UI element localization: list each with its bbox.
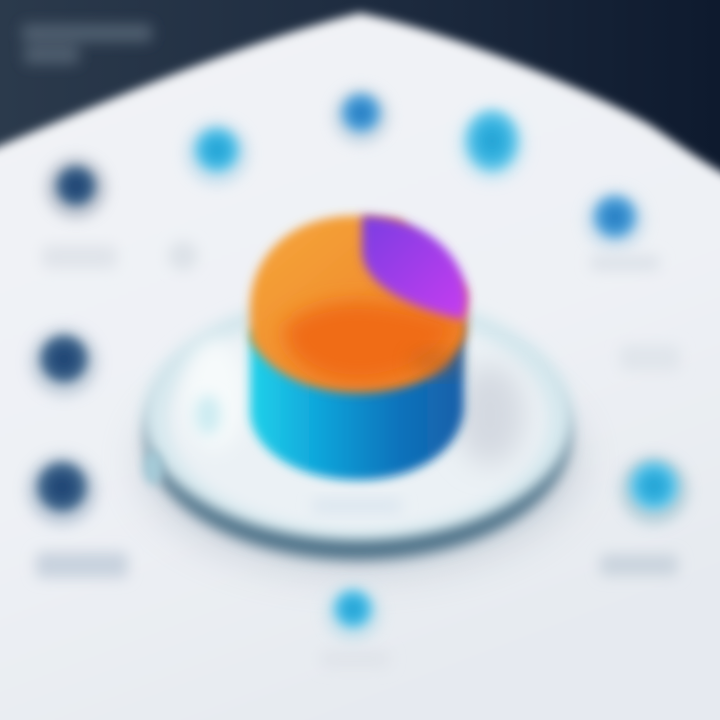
blurred labels [36,245,680,668]
label: lower right [600,554,678,576]
node: lower left [27,455,97,525]
blurred header title [22,24,152,64]
node: top center [333,88,389,144]
platform inner disc [168,310,548,530]
platform top [142,292,574,540]
label: bottom [320,650,390,668]
node: right blue [585,190,645,250]
platform left tab [143,451,163,485]
orange slice main [250,216,466,392]
label: lower left [36,552,128,578]
node: small faint [168,241,198,271]
platform base [146,312,570,560]
icon nodes [27,88,688,641]
platform left highlight [185,340,245,450]
platform right shadow [456,365,524,465]
node: upper left blue [185,121,249,185]
platform cast shadow [140,350,580,574]
node: middle left [30,328,98,396]
node: upper right cyan [458,107,526,181]
platform marker [195,395,221,435]
label: top left [42,245,117,269]
node: bottom center [325,585,381,641]
label: right [590,255,660,271]
orange slice shade [411,352,459,372]
platform ring [140,292,580,574]
node: top left navy [46,158,106,218]
cylinder blue body [250,320,464,480]
purple slice [362,216,468,320]
platform bottom label [312,498,402,514]
label: far right [620,345,680,371]
cylinder pie chart [250,216,468,480]
orange slice lower [285,302,455,382]
node: lower right teal [620,456,688,524]
